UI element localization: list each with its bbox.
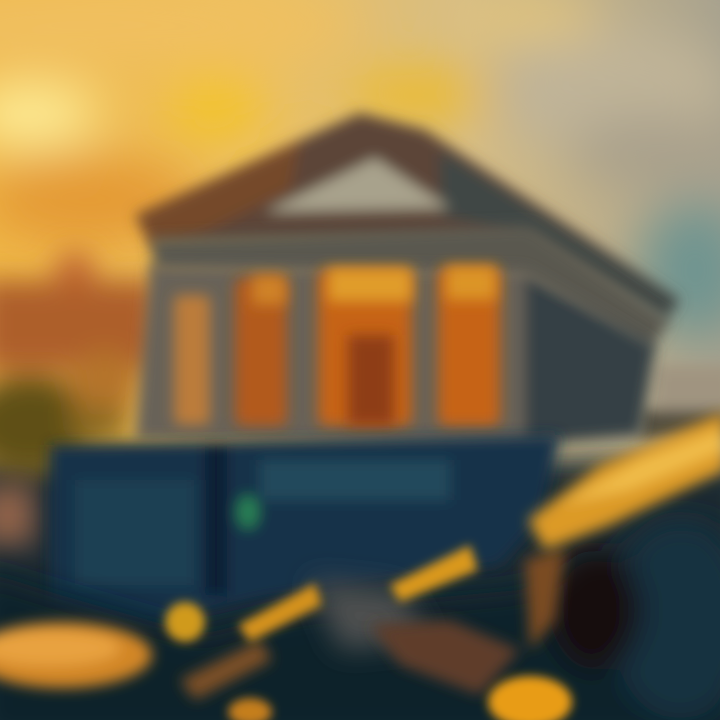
rubble and wooden pieces <box>310 580 430 650</box>
glowing doorways between columns <box>174 268 500 426</box>
doorway highlights <box>252 266 496 425</box>
gold coins <box>0 412 720 720</box>
distant landscape at right <box>640 365 720 440</box>
entablature <box>150 225 670 350</box>
coin: large right <box>528 412 720 550</box>
dark blue base panel <box>50 435 560 625</box>
temple <box>135 113 680 445</box>
rubble: brown planks <box>180 548 565 700</box>
roof pediment <box>135 113 680 320</box>
dark foreground <box>0 520 720 720</box>
distant landscape at left <box>0 252 160 545</box>
coin: small pieces <box>165 545 478 642</box>
coin: bottom <box>228 676 572 720</box>
temple body <box>135 265 655 445</box>
lower scene base <box>0 460 720 720</box>
coin: large left <box>0 622 152 688</box>
